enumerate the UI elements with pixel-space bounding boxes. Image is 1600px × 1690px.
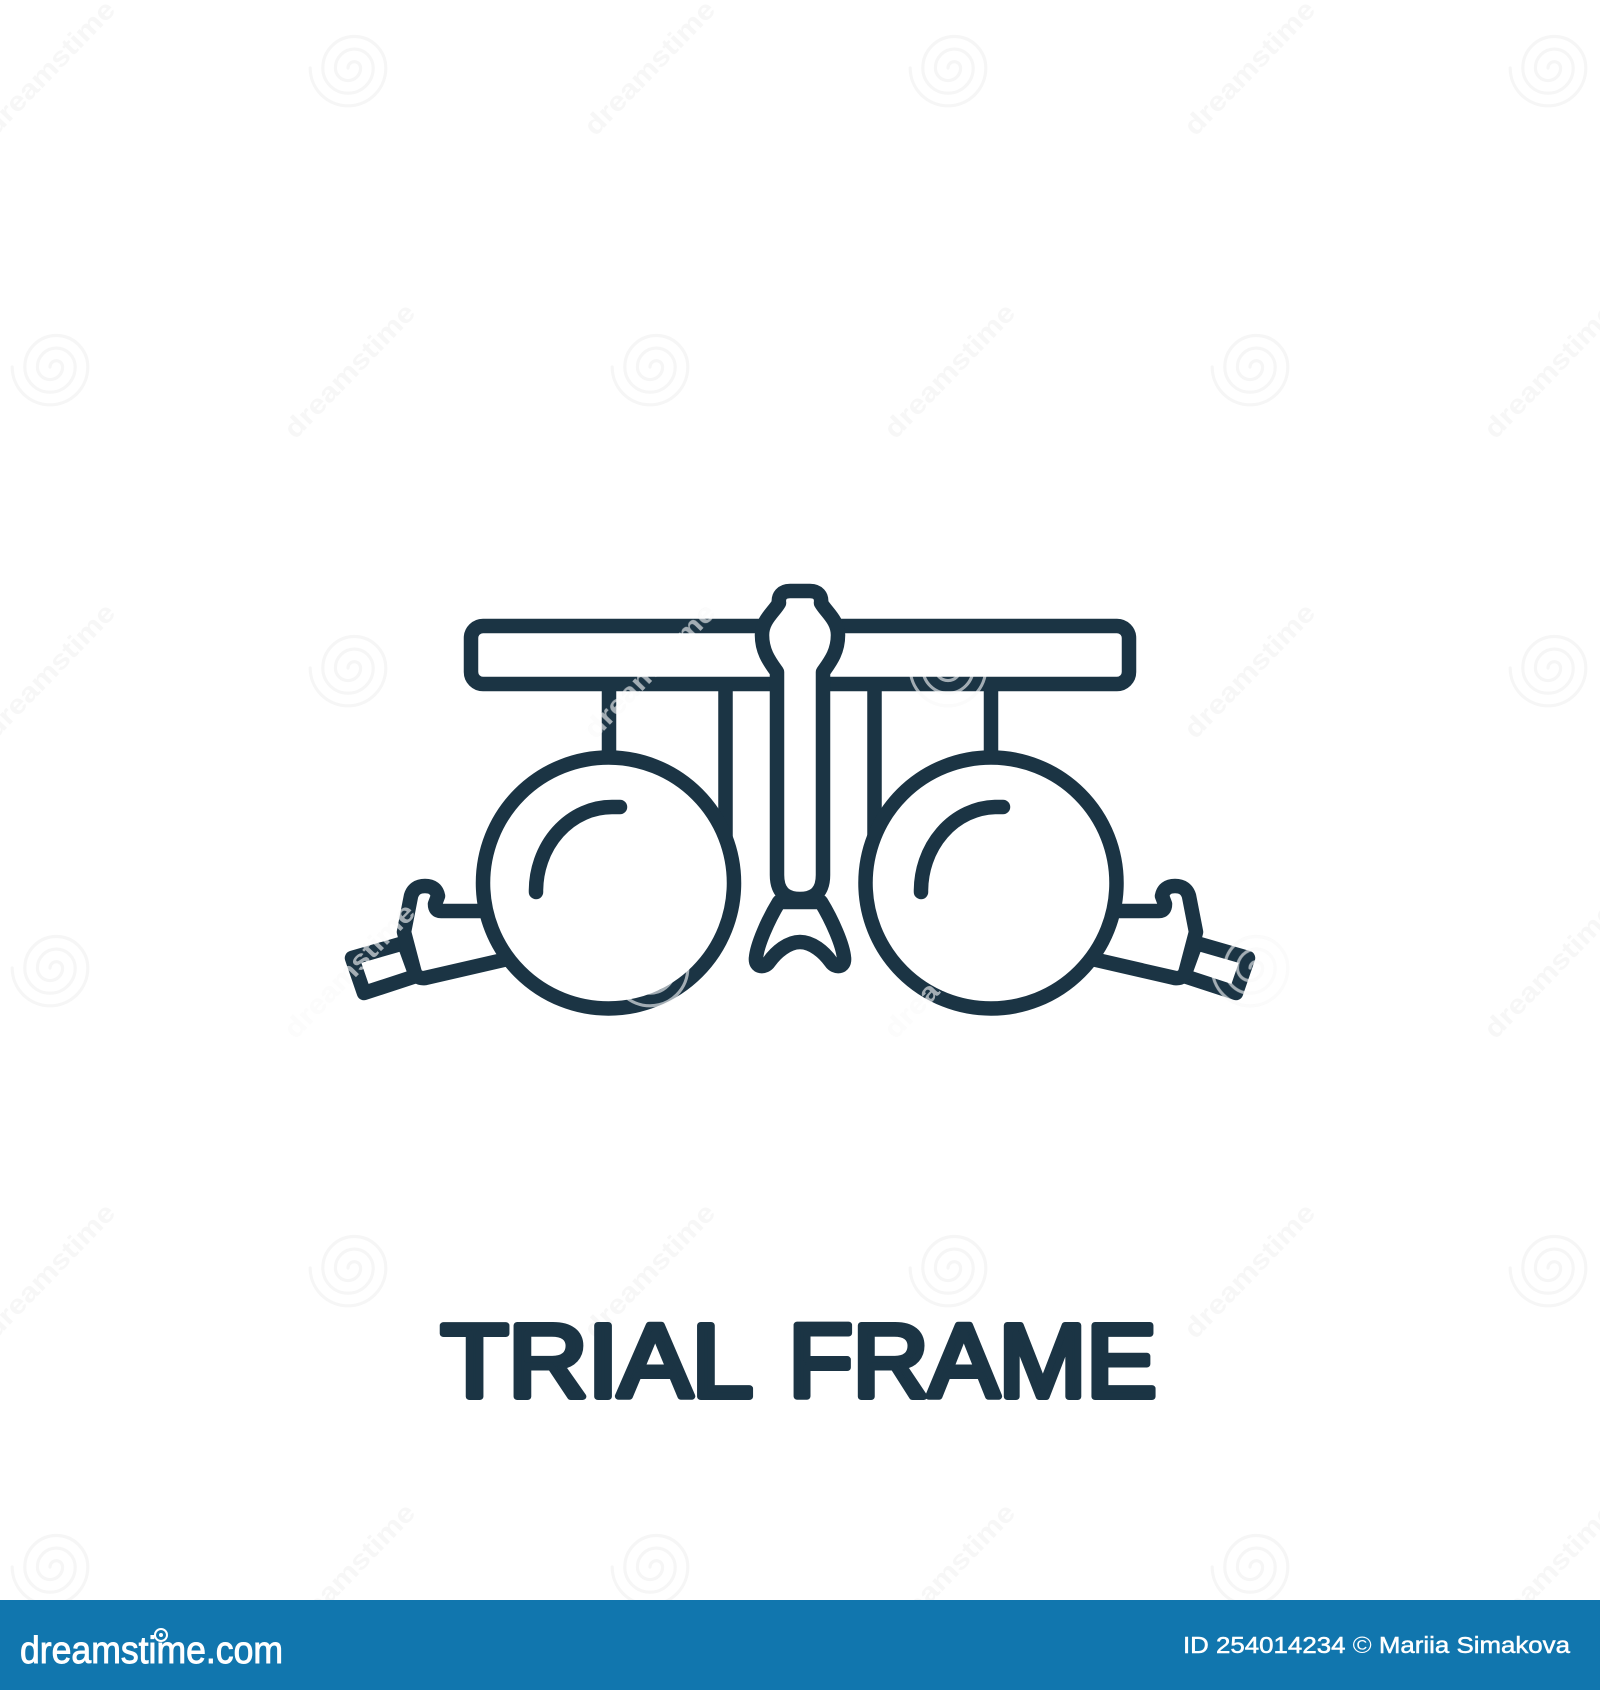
right lens highlight xyxy=(921,807,1003,892)
title: FRAME xyxy=(788,1304,1156,1418)
background watermark pattern: dreamstime xyxy=(878,1497,1021,1644)
left lens xyxy=(483,758,734,1008)
background watermark pattern: dreamstime xyxy=(578,1197,721,1344)
watermark overlay on artwork: dreamstime xyxy=(878,897,1021,1044)
title xyxy=(441,1304,1156,1418)
watermark overlay on artwork: dreamstime xyxy=(278,897,421,1044)
footer banner xyxy=(0,1600,1600,1690)
background watermark pattern: dreamstime xyxy=(278,897,421,1044)
background watermark pattern: dreamstime xyxy=(578,597,721,744)
title: TRIAL xyxy=(441,1304,753,1418)
background watermark pattern: dreamstime xyxy=(878,297,1021,444)
center adjuster knob and stem xyxy=(762,591,838,899)
background watermark pattern: dreamstime xyxy=(1178,0,1321,141)
right temple arm xyxy=(1088,886,1248,993)
background watermark pattern: dreamstime xyxy=(878,897,1021,1044)
icon: trial frame xyxy=(352,591,1248,1008)
footer credit: ID 254014234 © Mariia Simakova xyxy=(1183,1632,1571,1658)
right lens xyxy=(866,758,1116,1008)
footer logo: dreamstime.com xyxy=(20,1630,283,1672)
background watermark pattern: dreamstime xyxy=(1178,597,1321,744)
left temple arm xyxy=(352,886,512,993)
nose piece xyxy=(756,902,844,966)
watermark overlay on artwork xyxy=(278,597,1288,1044)
watermark overlay on artwork: dreamstime xyxy=(578,597,721,744)
background watermark pattern: dreamstime xyxy=(1178,1197,1321,1344)
top bar xyxy=(471,626,1129,684)
left lens highlight xyxy=(536,807,620,892)
background watermark pattern: dreamstime xyxy=(278,297,421,444)
background watermark pattern: dreamstime xyxy=(278,1497,421,1644)
background watermark pattern: dreamstime xyxy=(578,0,721,141)
left lens hanger rods xyxy=(609,688,726,840)
right lens hanger rods xyxy=(874,688,991,840)
